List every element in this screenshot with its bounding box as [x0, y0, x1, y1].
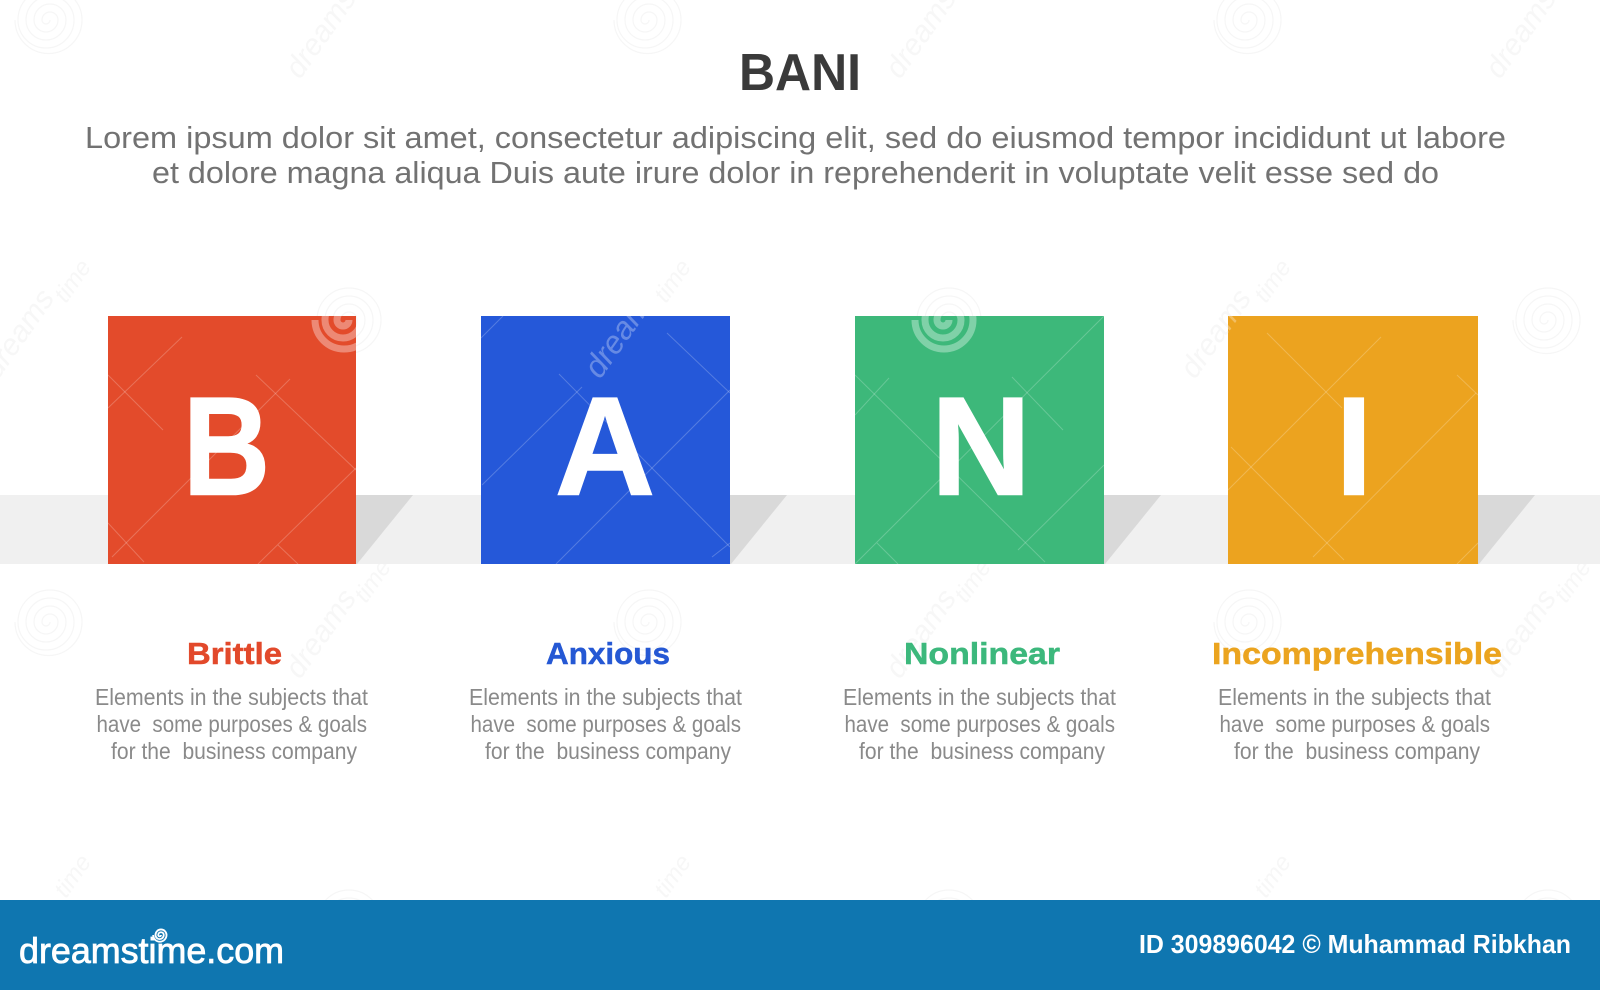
description: Anxious: have some purposes & goals — [470, 711, 741, 737]
description: Brittle: for the business company — [111, 738, 357, 764]
heading: Brittle: Brittle — [187, 636, 282, 671]
column: Anxious — [469, 636, 743, 764]
letter I: I — [1336, 368, 1372, 524]
horizontal grey band — [0, 495, 1600, 564]
heading: Nonlinear: Nonlinear — [904, 636, 1060, 671]
heading: Incomprehensible: Incomprehensible — [1212, 636, 1502, 671]
footer credit: ID 309896042 © Muhammad Ribkhan — [1139, 929, 1571, 959]
description: Incomprehensible: for the business company — [1234, 738, 1480, 764]
description: Nonlinear: for the business company — [859, 738, 1105, 764]
icon: logo spiral — [153, 929, 167, 942]
background watermark pattern: dreams — [879, 583, 963, 684]
footer bar — [0, 900, 1600, 990]
subtitle text: et dolore magna aliqua Duis aute irure dolor in reprehenderit in voluptate velit esse sed do — [152, 155, 1439, 190]
subtitle text: Lorem ipsum dolor sit amet, consectetur adipiscing elit, sed do eiusmod tempor incididunt ut labore — [85, 120, 1506, 155]
background watermark pattern: time — [1249, 850, 1297, 902]
subtitle text — [85, 120, 1506, 190]
background watermark pattern: time — [649, 255, 697, 307]
letter B: B — [183, 368, 270, 524]
description: Brittle: Elements in the subjects that — [95, 684, 369, 710]
description: Incomprehensible — [1218, 684, 1492, 764]
background watermark pattern: dreams — [279, 583, 363, 684]
background watermark pattern: dreams — [1479, 583, 1563, 684]
background watermark pattern: time — [949, 555, 997, 607]
title: BANI — [739, 44, 861, 102]
description: Nonlinear — [843, 684, 1117, 764]
background watermark pattern: time — [649, 850, 697, 902]
background watermark pattern: time — [49, 255, 97, 307]
background watermark pattern: time — [1549, 555, 1597, 607]
column: Nonlinear — [843, 636, 1117, 764]
background watermark pattern: time — [1249, 255, 1297, 307]
square A (blue): dreams — [576, 276, 667, 384]
square N (green) — [855, 296, 1104, 564]
column: Brittle — [95, 636, 369, 764]
description: Anxious: for the business company — [485, 738, 731, 764]
letter N: N — [931, 368, 1031, 524]
description: Anxious: Elements in the subjects that — [469, 684, 743, 710]
square B (red) — [108, 316, 356, 564]
square A (blue) — [481, 316, 730, 564]
description: Anxious — [469, 684, 743, 764]
heading: Anxious: Anxious — [546, 636, 670, 671]
description: Incomprehensible: Elements in the subjects that — [1218, 684, 1492, 710]
description: Nonlinear: have some purposes & goals — [844, 711, 1115, 737]
description: Incomprehensible: have some purposes & goals — [1220, 711, 1490, 737]
background watermark pattern: time — [49, 850, 97, 902]
description: Nonlinear: Elements in the subjects that — [843, 684, 1117, 710]
footer logo: dreamstime.com: dreamstime.com — [19, 930, 284, 971]
square I (yellow): dreams — [1174, 283, 1258, 384]
background watermark pattern: dreams — [1174, 283, 1258, 384]
column: Incomprehensible — [1212, 636, 1502, 764]
square I (yellow) — [1228, 316, 1478, 564]
description: Brittle — [95, 684, 369, 764]
background watermark pattern: time — [349, 555, 397, 607]
letter A: A — [555, 368, 655, 524]
description: Brittle: have some purposes & goals — [96, 711, 367, 737]
block shadows — [356, 495, 1535, 564]
